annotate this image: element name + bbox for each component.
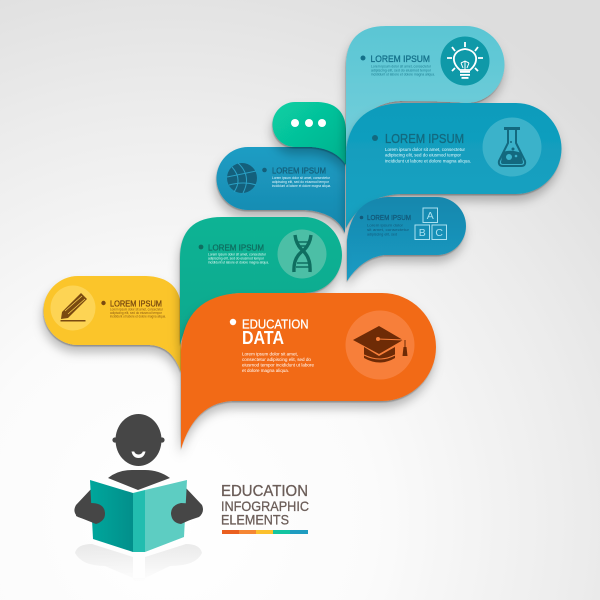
bullet dot: [199, 245, 203, 249]
bubble shape: [272, 102, 346, 165]
body text: light bulb: adipiscing elit, sed do eiusmod tempor: [371, 68, 432, 72]
bubble shape: [181, 293, 436, 449]
icon: person reading book: [74, 414, 203, 582]
heading: ABC: LOREM IPSUM: [367, 213, 411, 222]
body text: ABC: Lorem ipsum dolor: [367, 224, 404, 228]
head: [112, 414, 165, 466]
body text: education data: consectetur adipiscing elit, sed do: [242, 357, 312, 362]
body text: education data: [242, 352, 315, 373]
heading: DNA: LOREM IPSUM: [208, 242, 264, 252]
icon: pencil: [50, 286, 96, 330]
icon: DNA helix: [278, 230, 326, 278]
body text: flask: incididunt ut labore et dolore magna aliqua.: [385, 158, 471, 164]
heading: pencil: LOREM IPSUM: [110, 298, 162, 308]
bubble shape: [346, 103, 562, 232]
panel: light bulb bubble: [346, 26, 504, 172]
body text: light bulb: incididunt ut labore et dolore magna aliqua.: [371, 72, 435, 76]
body text: basketball: Lorem ipsum dolor sit amet, consectetur: [272, 176, 331, 180]
icon: ABC blocks: B: [419, 227, 426, 239]
icon: ABC blocks: C: [435, 227, 443, 239]
bubble shape: [43, 276, 181, 372]
panel: ABC bubble: [347, 197, 466, 281]
bullet dot: [101, 301, 106, 305]
body text: flask: Lorem ipsum dolor sit amet, consectetur: [385, 147, 466, 152]
bullet dot: [262, 168, 267, 172]
body text: basketball: incididunt ut labore et dolore magna aliqua.: [272, 184, 331, 188]
body text: ABC: sit amet, consectetur: [367, 228, 410, 232]
body text: ABC: [367, 224, 410, 236]
heading: education data: [242, 316, 308, 348]
body text: light bulb: [371, 64, 435, 76]
bullet dot: [360, 216, 363, 219]
icon: graduation cap: [346, 310, 414, 380]
heading: basketball: LOREM IPSUM: [272, 166, 326, 176]
panel: DNA bubble: [180, 217, 342, 345]
color legend bar: [222, 530, 308, 534]
body text: education data: et dolore magna aliqua.: [242, 368, 289, 373]
title: education infographic elements: INFOGRAPHIC: [221, 498, 309, 514]
bubble shape: [347, 197, 466, 281]
body text: flask: [385, 147, 471, 164]
body text: basketball: adipiscing elit, sed do eiusmod tempor: [272, 180, 330, 184]
icon: three dots: [291, 119, 326, 127]
bubble shape: [217, 147, 345, 233]
bullet dot: [360, 56, 366, 60]
body text: DNA: [208, 252, 269, 264]
bubble shape: [346, 26, 504, 172]
body text: pencil: incididunt ut labore et dolore magna aliqua.: [110, 314, 166, 318]
body text: education data: eiusmod tempor incididunt ut labore: [242, 362, 315, 368]
panel: pencil bubble: [43, 276, 181, 372]
open book: [90, 480, 187, 552]
title: education infographic elements: [221, 483, 309, 528]
panel: flask bubble: [346, 103, 562, 232]
body text: DNA: adipiscing elit, sed do eiusmod tempor: [208, 256, 265, 260]
hands: [76, 503, 201, 524]
title: education infographic elements: EDUCATION: [221, 483, 308, 500]
reflection: [75, 544, 202, 582]
bullet dot: [230, 319, 236, 325]
shoulders and arms: [74, 470, 203, 524]
body text: pencil: adipiscing elit, sed do eiusmod tempor: [110, 311, 163, 315]
body text: flask: adipiscing elit, sed do eiusmod tempor: [385, 152, 462, 158]
body text: basketball: [272, 176, 331, 188]
icon: ABC blocks: A: [427, 210, 434, 222]
panel: orange education data bubble: [181, 293, 436, 449]
bullet dot: [372, 135, 378, 141]
body text: education data: Lorem ipsum dolor sit amet,: [242, 352, 298, 356]
icon: light bulb: [440, 36, 490, 86]
body text: pencil: [110, 308, 166, 318]
heading: education data: DATA: [242, 328, 284, 348]
bubble shape: [180, 217, 342, 345]
body text: pencil: Lorem ipsum dolor sit amet, consectetur: [110, 308, 164, 312]
body text: light bulb: Lorem ipsum dolor sit amet, consectetur: [371, 64, 432, 68]
body text: DNA: incididunt ut labore et dolore magna aliqua.: [208, 260, 269, 264]
icon: flask: [482, 118, 542, 176]
heading: light bulb: LOREM IPSUM: [370, 54, 430, 65]
body text: DNA: Lorem ipsum dolor sit amet, consectetur: [208, 252, 267, 256]
panel: basketball bubble: [217, 147, 345, 233]
heading: education data: EDUCATION: [242, 316, 308, 332]
title: education infographic elements: ELEMENTS: [221, 512, 289, 528]
heading: flask: LOREM IPSUM: [385, 132, 464, 146]
body text: ABC: adipiscing elit, sed: [367, 232, 397, 236]
icon: basketball: [227, 163, 257, 193]
icon: ABC blocks: [415, 208, 446, 240]
panel: speech bubble: [272, 102, 346, 165]
